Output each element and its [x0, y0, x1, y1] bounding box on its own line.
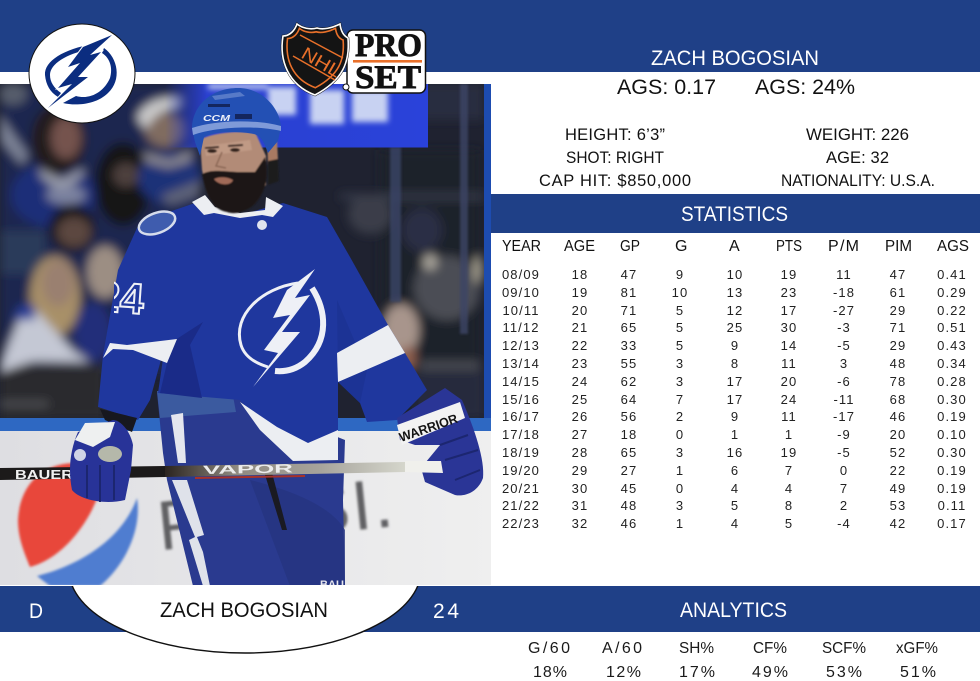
- row 18/19: 52: [890, 445, 906, 460]
- row 15/16: 68: [890, 392, 906, 407]
- player bio right: [781, 126, 935, 190]
- row 22/23: 32: [572, 516, 588, 531]
- row 20/21: [502, 481, 967, 496]
- row 22/23: 22/23: [502, 516, 540, 531]
- row 09/10: 23: [781, 285, 797, 300]
- analytics labels: SH%: [679, 640, 714, 657]
- analytics table: [528, 640, 938, 681]
- row 08/09: 9: [676, 267, 684, 282]
- row 19/20: 27: [621, 463, 637, 478]
- row 16/17: 0.19: [937, 409, 967, 424]
- analytics labels: A/60: [602, 640, 642, 657]
- row 11/12: 65: [621, 320, 637, 335]
- jersey crest: lightning bolt: [239, 269, 323, 387]
- player bio left: [539, 126, 691, 190]
- summary AGS values: AGS: 24%: [755, 76, 855, 99]
- right sleeve stripe: [337, 325, 405, 382]
- row 11/12: -3: [837, 320, 851, 335]
- row 20/21: 0: [676, 481, 684, 496]
- jersey hem stripe: [240, 402, 338, 461]
- statistics header band: STATISTICS: [681, 203, 788, 226]
- row 08/09: 19: [781, 267, 797, 282]
- row 08/09: 18: [572, 267, 588, 282]
- row 08/09: 47: [621, 267, 637, 282]
- row 20/21: 0.19: [937, 481, 967, 496]
- row 13/14: [502, 356, 967, 371]
- left sleeve stripe: [103, 339, 177, 363]
- row 18/19: 0.30: [937, 445, 967, 460]
- NHL Pro Set logo: PRO: [355, 28, 422, 64]
- row 15/16: 15/16: [502, 392, 540, 407]
- row 15/16: 17: [727, 392, 743, 407]
- photo background: arena and crowd: [0, 83, 491, 424]
- row 11/12: 25: [727, 320, 743, 335]
- row 16/17: 26: [572, 409, 588, 424]
- row 08/09: 08/09: [502, 267, 540, 282]
- pepsi logo: [18, 463, 138, 586]
- row 12/13: 12/13: [502, 338, 540, 353]
- row 11/12: 21: [572, 320, 588, 335]
- row 12/13: 9: [731, 338, 739, 353]
- player bio right: NATIONALITY: U.S.A.: [781, 172, 935, 190]
- row 16/17: 56: [621, 409, 637, 424]
- table header: PIM: [885, 238, 912, 255]
- row 14/15: 20: [781, 374, 797, 389]
- row 13/14: 48: [890, 356, 906, 371]
- row 17/18: 1: [731, 427, 739, 442]
- row 19/20: 0: [840, 463, 848, 478]
- jersey number: 24: [433, 600, 459, 623]
- row 14/15: 3: [676, 374, 684, 389]
- row 15/16: 24: [781, 392, 797, 407]
- row 11/12: 5: [676, 320, 684, 335]
- row 22/23: [502, 516, 967, 531]
- row 19/20: 29: [572, 463, 588, 478]
- pants: BAU: [320, 579, 344, 591]
- row 17/18: [502, 427, 967, 442]
- row 18/19: -5: [837, 445, 851, 460]
- row 21/22: 8: [785, 498, 793, 513]
- right glove: [397, 388, 483, 495]
- row 08/09: 0.41: [937, 267, 967, 282]
- right glove: WARRIOR: [397, 411, 460, 445]
- jersey: [95, 195, 427, 461]
- bottom blue band: [0, 586, 980, 632]
- row 10/11: 29: [890, 303, 906, 318]
- row 13/14: 55: [621, 356, 637, 371]
- row 22/23: 4: [731, 516, 739, 531]
- row 10/11: 12: [727, 303, 743, 318]
- row 08/09: 10: [727, 267, 743, 282]
- name plate text: ZACH BOGOSIAN: [160, 599, 328, 622]
- row 12/13: 5: [676, 338, 684, 353]
- analytics values: 49%: [752, 664, 788, 681]
- row 21/22: [502, 498, 966, 513]
- player bio left: CAP HIT: $850,000: [539, 172, 691, 190]
- NHL Pro Set logo: [282, 24, 426, 96]
- board lettering: PEPSI.: [154, 463, 396, 565]
- row 22/23: 46: [621, 516, 637, 531]
- row 19/20: 0.19: [937, 463, 967, 478]
- row 13/14: 3: [676, 356, 684, 371]
- row 13/14: 3: [840, 356, 848, 371]
- row 14/15: 78: [890, 374, 906, 389]
- row 12/13: -5: [837, 338, 851, 353]
- row 21/22: 0.11: [938, 498, 966, 513]
- analytics values: 12%: [606, 664, 641, 681]
- row 09/10: 13: [727, 285, 743, 300]
- row 15/16: -11: [833, 392, 855, 407]
- analytics labels: xGF%: [896, 640, 938, 657]
- analytics labels: G/60: [528, 640, 570, 657]
- row 20/21: 45: [621, 481, 637, 496]
- position label: D: [29, 600, 43, 623]
- row 15/16: 7: [676, 392, 684, 407]
- row 20/21: 20/21: [502, 481, 540, 496]
- row 21/22: 21/22: [502, 498, 540, 513]
- hockey stick: VAPOR: [203, 461, 294, 477]
- row 12/13: 29: [890, 338, 906, 353]
- row 21/22: 2: [840, 498, 848, 513]
- row 17/18: 1: [785, 427, 793, 442]
- row 19/20: 1: [676, 463, 684, 478]
- player bio left: SHOT: RIGHT: [566, 149, 664, 167]
- row 21/22: 48: [621, 498, 637, 513]
- head: [192, 88, 281, 213]
- row 12/13: [502, 338, 967, 353]
- row 22/23: 5: [785, 516, 793, 531]
- row 13/14: 0.34: [937, 356, 967, 371]
- row 12/13: 14: [781, 338, 797, 353]
- row 17/18: 0.10: [937, 427, 967, 442]
- analytics labels: SCF%: [822, 640, 866, 657]
- row 17/18: 18: [621, 427, 637, 442]
- row 12/13: 22: [572, 338, 588, 353]
- row 10/11: 5: [676, 303, 684, 318]
- pants: [157, 391, 345, 591]
- analytics heading: ANALYTICS: [680, 599, 787, 622]
- team logo: [29, 24, 135, 123]
- row 09/10: 81: [621, 285, 637, 300]
- table header: A: [729, 238, 740, 255]
- sleeve number: 24: [95, 273, 146, 324]
- row 14/15: [502, 374, 967, 389]
- row 09/10: 10: [672, 285, 688, 300]
- row 14/15: 14/15: [502, 374, 540, 389]
- row 15/16: 0.30: [937, 392, 967, 407]
- row 12/13: 33: [621, 338, 637, 353]
- row 13/14: 8: [731, 356, 739, 371]
- white strip under top band: [0, 72, 490, 84]
- row 17/18: 0: [676, 427, 684, 442]
- row 14/15: 24: [572, 374, 588, 389]
- row 17/18: 20: [890, 427, 906, 442]
- row 16/17: 46: [890, 409, 906, 424]
- row 16/17: 16/17: [502, 409, 540, 424]
- row 21/22: 5: [731, 498, 739, 513]
- row 17/18: -9: [837, 427, 851, 442]
- player name header: ZACH BOGOSIAN: [651, 47, 819, 70]
- row 18/19: [502, 445, 967, 460]
- table header: AGE: [564, 238, 595, 255]
- row 19/20: 6: [731, 463, 739, 478]
- row 09/10: 61: [890, 285, 906, 300]
- row 15/16: [502, 392, 967, 407]
- row 16/17: -17: [833, 409, 855, 424]
- row 20/21: 49: [890, 481, 906, 496]
- table header: AGS: [937, 238, 969, 255]
- table header: P/M: [828, 238, 859, 255]
- row 16/17: 2: [676, 409, 684, 424]
- hockey stick: [0, 461, 443, 482]
- row 11/12: 11/12: [502, 320, 540, 335]
- analytics values: 17%: [679, 664, 715, 681]
- NHL Pro Set logo: SET: [355, 60, 421, 96]
- row 16/17: 9: [731, 409, 739, 424]
- NHL Pro Set logo: NHL: [298, 43, 344, 81]
- row 16/17: [502, 409, 967, 424]
- row 18/19: 19: [781, 445, 797, 460]
- row 18/19: 65: [621, 445, 637, 460]
- table header: G: [675, 238, 687, 255]
- row 09/10: 09/10: [502, 285, 540, 300]
- row 09/10: 19: [572, 285, 588, 300]
- row 11/12: 0.51: [937, 320, 967, 335]
- row 14/15: 62: [621, 374, 637, 389]
- row 08/09: 11: [836, 267, 852, 282]
- table header: YEAR: [502, 238, 541, 255]
- row 09/10: 0.29: [937, 285, 967, 300]
- player photo: [0, 83, 491, 591]
- row 20/21: 4: [785, 481, 793, 496]
- hockey stick: BAUER: [15, 467, 74, 482]
- row 21/22: 53: [890, 498, 906, 513]
- statistics table: [502, 238, 969, 531]
- row 18/19: 3: [676, 445, 684, 460]
- row 19/20: [502, 463, 967, 478]
- row 19/20: 22: [890, 463, 906, 478]
- table header: GP: [620, 238, 640, 255]
- row 14/15: -6: [837, 374, 851, 389]
- jumbotron: [165, 84, 428, 148]
- row 12/13: 0.43: [937, 338, 967, 353]
- player bio right: AGE: 32: [826, 149, 889, 167]
- player bio right: WEIGHT: 226: [806, 126, 909, 144]
- row 20/21: 4: [731, 481, 739, 496]
- analytics values: 51%: [900, 664, 936, 681]
- summary AGS values: [617, 76, 855, 99]
- analytics labels: CF%: [753, 640, 787, 657]
- table header: PTS: [776, 238, 802, 255]
- row 19/20: 7: [785, 463, 793, 478]
- collar: [192, 195, 283, 218]
- row 13/14: 11: [781, 356, 797, 371]
- row 15/16: 25: [572, 392, 588, 407]
- row 13/14: 23: [572, 356, 588, 371]
- row 20/21: 7: [840, 481, 848, 496]
- row 17/18: 17/18: [502, 427, 540, 442]
- row 19/20: 19/20: [502, 463, 540, 478]
- row 15/16: 64: [621, 392, 637, 407]
- row 21/22: 3: [676, 498, 684, 513]
- row 18/19: 28: [572, 445, 588, 460]
- row 22/23: 0.17: [937, 516, 967, 531]
- row 18/19: 16: [727, 445, 743, 460]
- row 10/11: 20: [572, 303, 588, 318]
- row 22/23: 1: [676, 516, 684, 531]
- row 11/12: 30: [781, 320, 797, 335]
- row 09/10: [502, 285, 967, 300]
- row 22/23: 42: [890, 516, 906, 531]
- row 08/09: 47: [890, 267, 906, 282]
- left glove: [70, 409, 137, 502]
- analytics values: 18%: [533, 664, 567, 681]
- row 11/12: [502, 320, 967, 335]
- row 10/11: 17: [781, 303, 797, 318]
- summary AGS values: AGS: 0.17: [617, 76, 716, 99]
- row 18/19: 18/19: [502, 445, 540, 460]
- row 10/11: 0.22: [937, 303, 967, 318]
- row 14/15: 0.28: [937, 374, 967, 389]
- row 14/15: 17: [727, 374, 743, 389]
- helmet: CCM: [203, 114, 230, 123]
- analytics labels: [528, 640, 938, 657]
- table header: [502, 238, 969, 255]
- player bio left: HEIGHT: 6’3”: [565, 126, 665, 144]
- row 21/22: 31: [572, 498, 588, 513]
- row 09/10: -18: [833, 285, 855, 300]
- row 17/18: 27: [572, 427, 588, 442]
- row 08/09: [502, 267, 967, 282]
- rink boards: [0, 418, 491, 586]
- row 10/11: 10/11: [502, 303, 540, 318]
- name plate curve: [72, 586, 418, 654]
- row 10/11: [502, 303, 967, 318]
- statistics header band: [491, 194, 980, 233]
- shoulder patch: [138, 210, 176, 236]
- analytics values: 53%: [826, 664, 862, 681]
- row 13/14: 13/14: [502, 356, 540, 371]
- row 22/23: -4: [837, 516, 851, 531]
- row 11/12: 71: [890, 320, 906, 335]
- row 20/21: 30: [572, 481, 588, 496]
- row 10/11: -27: [833, 303, 855, 318]
- row 10/11: 71: [621, 303, 637, 318]
- top blue band: [0, 0, 980, 72]
- row 16/17: 11: [781, 409, 797, 424]
- analytics values: [533, 664, 936, 681]
